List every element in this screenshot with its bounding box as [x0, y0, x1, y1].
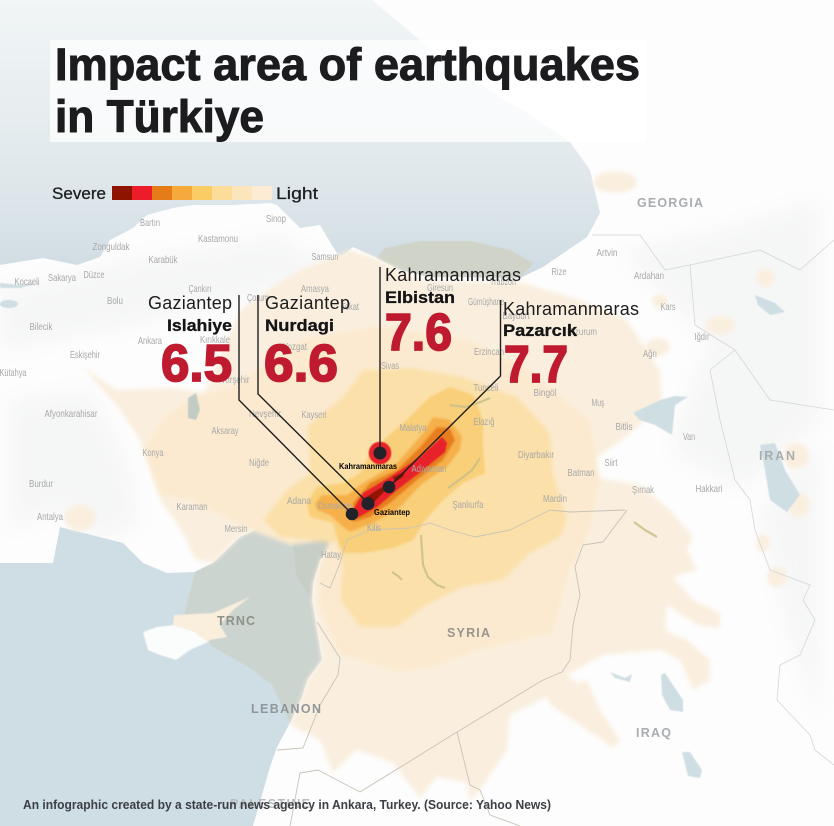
country labels: SYRIA [447, 626, 490, 640]
province labels: Malatya [400, 422, 427, 434]
label: Nurdagi 6.6: 6.6 [264, 335, 338, 393]
province labels: Adana [287, 495, 311, 507]
epicentre markers [346, 446, 395, 520]
contour: dark red [365, 483, 390, 505]
legend: severity scale: Light [276, 184, 318, 203]
province labels: Şırnak [632, 484, 655, 496]
contour: yellow [307, 387, 485, 553]
rivers and reservoirs [392, 398, 657, 588]
contour: red band [354, 437, 447, 518]
province labels: Samsun [312, 251, 339, 263]
province labels: Hatay [321, 549, 342, 561]
label: Pazarcik 7.7: Kahramanmaras [503, 299, 639, 319]
province labels: Rize [552, 266, 567, 278]
province labels: Kastamonu [198, 233, 238, 245]
label: Nurdagi 6.6: Gaziantep [265, 293, 350, 313]
province labels: Çankırı [188, 283, 212, 295]
province labels: Bitlis [616, 421, 632, 433]
province labels: Tunceli [474, 382, 498, 394]
province labels: Antalya [37, 511, 63, 523]
province labels: Zonguldak [92, 241, 130, 253]
province labels: Gümüşhane [468, 296, 504, 308]
province labels: Karaman [176, 501, 208, 513]
province labels: Tokat [341, 301, 359, 313]
country labels: IRAN [759, 449, 795, 463]
legend: severity scale: Severe [52, 184, 106, 203]
leader line: Elbistan [379, 267, 381, 453]
province labels: Bayburt [502, 310, 530, 322]
country labels: GEORGIA [637, 196, 703, 210]
province labels: Konya [142, 447, 164, 459]
province labels: Ankara [138, 335, 162, 347]
province labels: Nevşehir [249, 408, 281, 420]
province labels: Giresun [427, 282, 453, 294]
province labels: Burdur [29, 478, 53, 490]
sea: Mediterranean [0, 527, 333, 826]
maritime zones [184, 241, 533, 723]
country labels: IRAQ [636, 726, 671, 740]
province labels: Kırıkkale [200, 334, 230, 346]
province labels: Erzurum [567, 326, 597, 338]
label: Pazarcik 7.7: 7.7 [504, 336, 568, 394]
label: Elbistan 7.6 [385, 265, 521, 362]
province labels: Düzce [84, 269, 105, 281]
contour: light 3 [263, 368, 567, 627]
province labels: Kayseri [302, 409, 326, 421]
province labels: Sakarya [48, 272, 76, 284]
province labels: Bingöl [534, 387, 556, 399]
country labels [217, 196, 795, 811]
contour: orange [353, 427, 455, 522]
province labels: Van [683, 431, 695, 443]
legend: severity scale [52, 184, 318, 203]
sea: Black Sea [0, 0, 600, 278]
province labels: Karabük [148, 254, 178, 266]
country labels: LEBANON [251, 702, 321, 716]
province labels: Iğdır [694, 331, 710, 343]
province labels: Mardin [543, 493, 567, 505]
source note: An infographic created by a state-run news agency in Ankara, Turkey. (Source: Yahoo News) [23, 798, 551, 812]
province labels: Sivas [381, 360, 399, 372]
label: Elbistan 7.6: 7.6 [385, 304, 452, 362]
province labels: Afyonkarahisar [44, 408, 98, 420]
label: Islahiye 6.5: Islahiye [167, 316, 232, 335]
label: Nurdagi 6.6: Nurdagi [265, 316, 334, 335]
label: Islahiye 6.5: 6.5 [161, 335, 232, 393]
province labels: Şanlıurfa [452, 499, 484, 511]
city label: Kahramanmaras: Kahramanmaras [339, 461, 397, 471]
province labels: Ardahan [634, 270, 664, 282]
province labels: Elazığ [474, 416, 495, 428]
province labels: Kilis [367, 522, 381, 534]
province labels: Mersin [224, 523, 248, 535]
province labels: Ağrı [643, 348, 657, 360]
terrain shading [0, 200, 820, 720]
province labels: Eskişehir [70, 349, 100, 361]
province labels: Kırşehir [222, 374, 250, 386]
province labels: Niğde [249, 457, 269, 469]
province labels: Kütahya [0, 367, 27, 379]
province labels: Bartın [140, 217, 160, 229]
label: Islahiye 6.5 [148, 293, 232, 393]
epicentre halo [369, 442, 391, 464]
label: Pazarcik 7.7: Pazarcık [503, 321, 578, 340]
label: Pazarcik 7.7 [503, 299, 639, 394]
contour: light 2 [143, 325, 600, 672]
province labels: Batman [568, 467, 595, 479]
eastern borders [592, 235, 834, 765]
leader line: Nurdagi [258, 295, 368, 503]
province labels: Muş [592, 397, 604, 409]
province labels: Artvin [596, 247, 618, 259]
label: Elbistan 7.6: Elbistan [385, 288, 455, 307]
province labels: Yozgat [283, 341, 307, 353]
contour: light patches [64, 171, 810, 587]
label: Nurdagi 6.6 [264, 293, 350, 393]
title: Impact area of earthquakes [55, 39, 640, 90]
province labels: Kars [660, 301, 676, 313]
province labels: Osmaniye [318, 500, 352, 512]
province labels: Siirt [604, 457, 618, 469]
province labels [0, 213, 722, 561]
province labels: Hakkari [696, 483, 722, 495]
contour: orange light [315, 417, 462, 532]
province labels: Erzincan [474, 346, 504, 358]
province labels: Çorum [247, 292, 269, 304]
province labels: Trabzon [490, 276, 516, 288]
leader line: Islahiye [239, 295, 352, 514]
title [50, 39, 646, 142]
title: in Türkiye [55, 91, 264, 142]
province labels: Kocaeli [14, 276, 40, 288]
contour: dark red north [393, 472, 405, 482]
province labels: Sinop [266, 213, 286, 225]
leader line: Pazarcik [389, 300, 500, 487]
label: Islahiye 6.5: Gaziantep [148, 293, 232, 313]
impact contours [64, 171, 810, 800]
province labels: Bolu [107, 295, 123, 307]
borders [277, 510, 627, 826]
country labels: PALESTINE [230, 797, 310, 811]
province labels: Adıyaman [412, 463, 447, 475]
Cyprus [143, 597, 250, 660]
city label: Gaziantep: Gaziantep [374, 507, 410, 517]
province labels: Amasya [301, 283, 329, 295]
country labels: TRNC [217, 614, 255, 628]
lakes [0, 283, 800, 778]
province labels: Bilecik [30, 321, 53, 333]
contour: lightest [83, 250, 720, 800]
province labels: Diyarbakır [518, 449, 554, 461]
label: Elbistan 7.6: Kahramanmaras [385, 265, 521, 285]
province labels: Aksaray [212, 425, 239, 437]
